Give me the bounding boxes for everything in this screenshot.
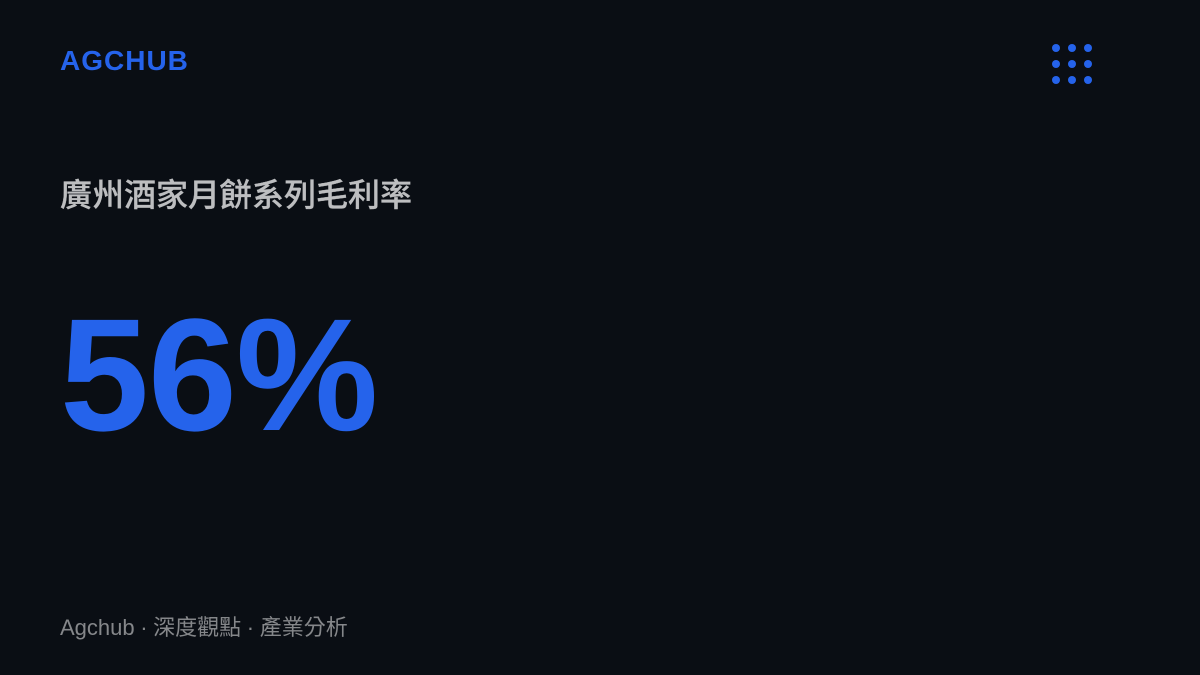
icon: dot grid <box>1052 44 1092 84</box>
footer text: Agchub · 深度觀點 · 產業分析 <box>60 615 348 640</box>
heading: 廣州酒家月餅系列毛利率 <box>60 177 412 213</box>
brand logo text: AGCHUB <box>60 45 189 76</box>
big number: 56% <box>60 285 377 464</box>
